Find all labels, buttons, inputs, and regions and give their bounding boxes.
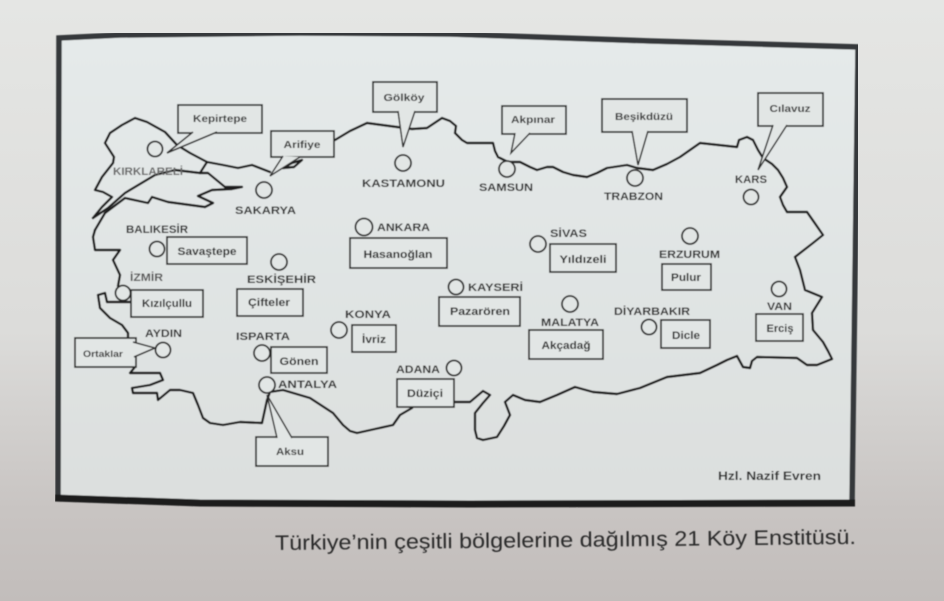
marker: Eskişehir with Çifteler box: ESKİŞEHİR xyxy=(247,273,316,286)
marker: Erzurum with Pulur box xyxy=(659,228,720,290)
marker: Isparta with Gönen box: Gönen xyxy=(280,356,319,368)
marker: Kayseri with Pazarören box xyxy=(439,280,523,326)
marker: Kars: KARS xyxy=(735,174,767,186)
callout: Arifiye: Arifiye xyxy=(284,140,321,151)
marker: Adana with Düziçi box: Düziçi xyxy=(407,388,443,400)
marker: Eskişehir with Çifteler box xyxy=(237,254,316,316)
marker: Samsun: SAMSUN xyxy=(479,182,533,194)
marker: Kars xyxy=(735,174,767,204)
marker: Trabzon: TRABZON xyxy=(604,191,663,203)
coastline: Marmara north shore xyxy=(93,162,207,218)
callout: Kepirtepe: Kepirtepe xyxy=(193,114,248,125)
coastline: Thrace xyxy=(93,118,270,218)
coastline: Sakarya gulf sliver xyxy=(283,160,302,168)
marker: Aydın: AYDIN xyxy=(145,328,182,340)
marker: Konya with İvriz box: KONYA xyxy=(345,309,391,321)
marker: Isparta with Gönen box xyxy=(236,331,327,373)
marker: Sivas with Yıldızeli box: SİVAS xyxy=(550,227,587,240)
marker: Konya with İvriz box: İvriz xyxy=(362,333,387,346)
marker: Van with Erciş box xyxy=(756,282,803,341)
marker: Kayseri with Pazarören box: KAYSERİ xyxy=(468,281,523,294)
marker: Ankara with Hasanoğlan box: ANKARA xyxy=(377,222,430,234)
marker: Isparta with Gönen box: ISPARTA xyxy=(236,331,290,343)
callout: Akpınar xyxy=(502,106,566,153)
marker: Malatya with Akçadağ box: MALATYA xyxy=(541,317,599,329)
callout: Aksu xyxy=(256,395,328,466)
marker: Adana with Düziçi box: ADANA xyxy=(396,364,440,376)
callout: Beşikdüzü xyxy=(602,99,687,165)
marker: Sivas with Yıldızeli box: Yıldızeli xyxy=(560,254,606,266)
map frame xyxy=(58,33,858,504)
marker: Diyarbakır with Dicle box xyxy=(614,305,710,348)
marker: Sakarya: SAKARYA xyxy=(235,205,296,217)
marker: Adana with Düziçi box xyxy=(396,360,462,407)
marker: Antalya: ANTALYA xyxy=(278,379,337,391)
marker: Balıkesir with Savaştepe box: BALIKESİR xyxy=(126,223,188,236)
marker: Kayseri with Pazarören box: Pazarören xyxy=(450,306,510,318)
map of Turkey xyxy=(75,82,832,466)
marker: Trabzon xyxy=(604,170,663,203)
marker: Balıkesir with Savaştepe box: Savaştepe xyxy=(178,246,236,258)
marker: Diyarbakır with Dicle box: DİYARBAKIR xyxy=(614,305,690,318)
marker: Aydın xyxy=(145,328,182,358)
marker: Konya with İvriz box xyxy=(331,309,396,352)
marker: Ankara with Hasanoğlan box: Hasanoğlan xyxy=(364,249,433,261)
marker: Eskişehir with Çifteler box: Çifteler xyxy=(248,297,291,309)
marker: Malatya with Akçadağ box xyxy=(529,296,603,359)
marker: Samsun xyxy=(479,161,533,194)
coastline: Marmara south shore xyxy=(95,173,242,230)
marker: Erzurum with Pulur box: ERZURUM xyxy=(659,249,720,261)
marker: Kastamonu: KASTAMONU xyxy=(362,178,445,190)
marker: Sivas with Yıldızeli box xyxy=(530,227,616,272)
marker: Kırklareli xyxy=(113,142,183,178)
marker: İzmir with Kızılçullu box: Kızılçullu xyxy=(142,298,192,310)
callout: Akpınar: Akpınar xyxy=(511,115,555,126)
callout: Kepirtepe xyxy=(167,105,262,153)
marker: Kırklareli: KIRKLARELİ xyxy=(113,165,183,178)
callout: Gölköy xyxy=(373,82,437,147)
marker: Kastamonu xyxy=(362,155,445,190)
callout: Ortaklar: Ortaklar xyxy=(83,349,124,359)
marker: Malatya with Akçadağ box: Akçadağ xyxy=(542,340,590,352)
callout: Ortaklar xyxy=(75,338,155,367)
callout: Arifiye xyxy=(270,131,334,176)
marker: Antalya xyxy=(259,377,337,393)
marker: Diyarbakır with Dicle box: Dicle xyxy=(672,330,700,342)
callout: Gölköy: Gölköy xyxy=(384,93,425,104)
coastline: Mediterranean xyxy=(130,367,412,433)
map frame bottom edge xyxy=(55,498,855,504)
marker: İzmir with Kızılçullu box: İZMİR xyxy=(130,271,163,284)
marker: Van with Erciş box: VAN xyxy=(767,301,792,313)
coastline: Anatolia xyxy=(335,118,832,440)
marker: Balıkesir with Savaştepe box xyxy=(126,223,247,264)
callout: Aksu: Aksu xyxy=(276,447,304,458)
marker: Sakarya xyxy=(235,182,296,217)
credit: Hzl. Nazif Evren xyxy=(718,469,821,483)
marker: Erzurum with Pulur box: Pulur xyxy=(671,272,702,284)
caption: Türkiye’nin çeşitli bölgelerine dağılmış 21 Köy Enstitüsü. xyxy=(275,526,856,555)
marker: İzmir with Kızılçullu box xyxy=(116,271,203,317)
callout: Beşikdüzü: Beşikdüzü xyxy=(615,112,673,123)
callout: Cılavuz xyxy=(758,93,823,170)
marker: Ankara with Hasanoğlan box xyxy=(350,218,447,268)
callout: Cılavuz: Cılavuz xyxy=(770,104,810,115)
marker: Van with Erciş box: Erciş xyxy=(766,323,794,335)
coastline: Aegean xyxy=(93,230,130,338)
